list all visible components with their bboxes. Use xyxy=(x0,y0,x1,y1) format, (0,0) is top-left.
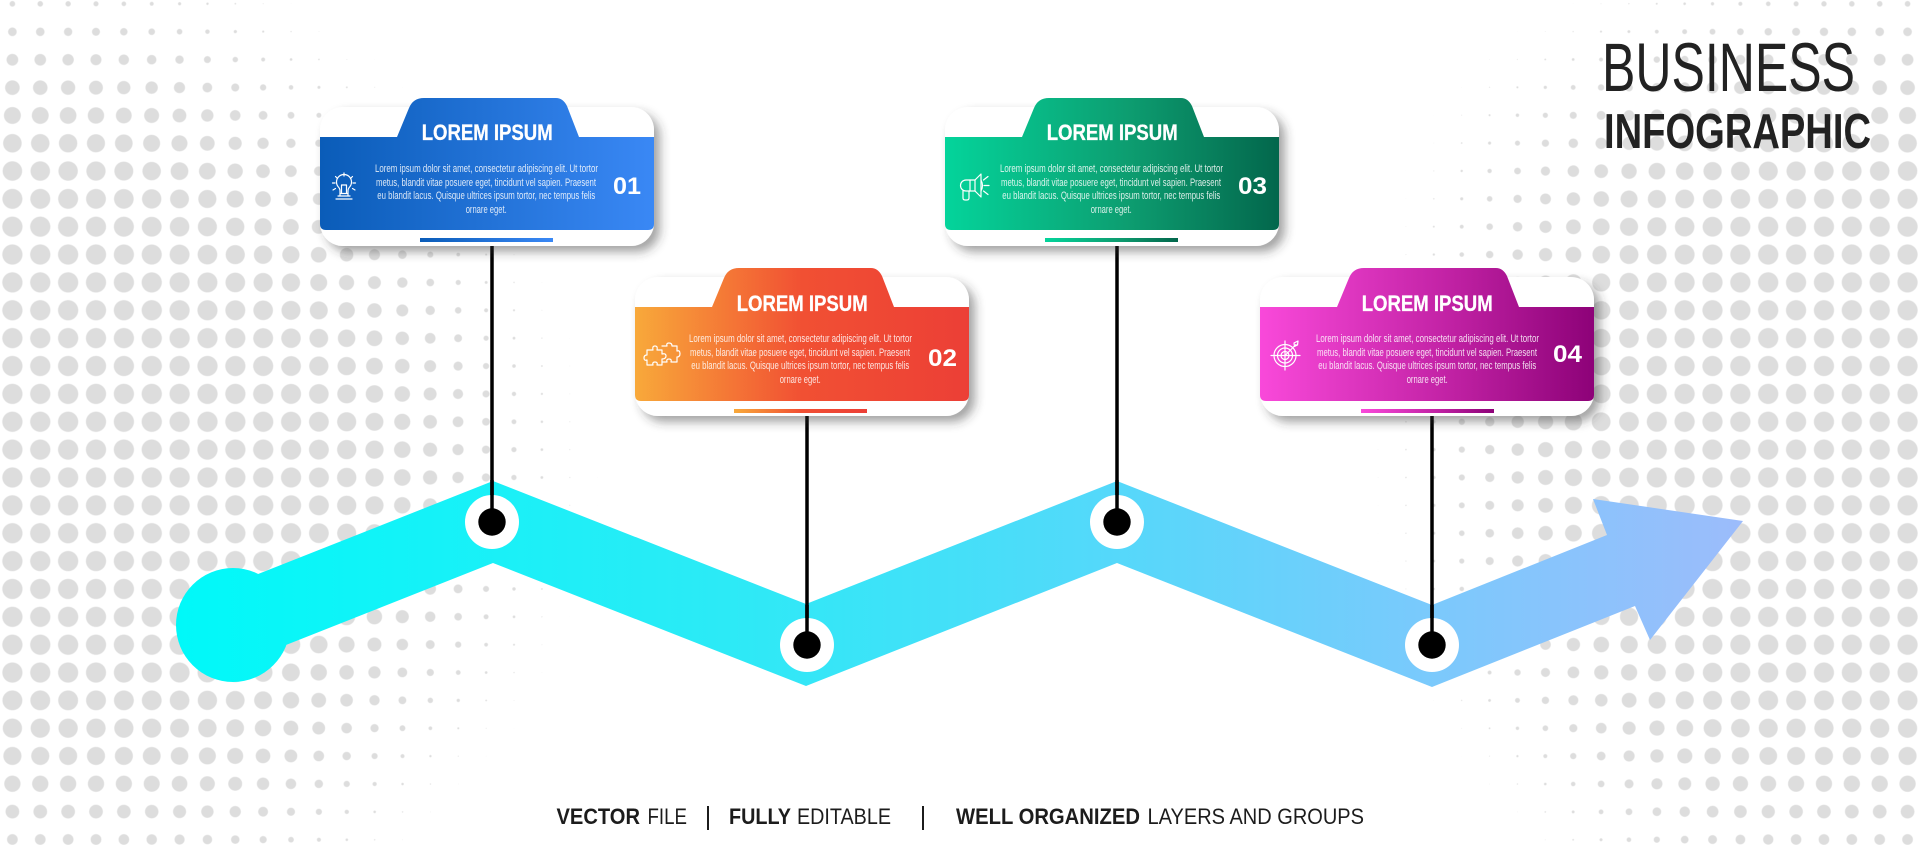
node 3 xyxy=(1090,480,1144,549)
heading 04: LOREM IPSUM xyxy=(1362,291,1493,316)
body text 03: eu blandit lacus. Quisque ultrices ipsum tortor, nec tempus felis xyxy=(1002,190,1221,202)
connector line 1 xyxy=(490,240,494,522)
number 03: 03 xyxy=(1238,173,1267,200)
icon: light bulb xyxy=(332,173,356,199)
footer tagline: FILE xyxy=(648,804,687,829)
heading 03: LOREM IPSUM xyxy=(1047,120,1178,145)
heading 01: LOREM IPSUM xyxy=(422,120,553,145)
panel: card 02 orange xyxy=(635,268,969,416)
connector line 2 xyxy=(805,410,809,645)
body text 04: ornare eget. xyxy=(1407,374,1448,386)
footer tagline: WELL ORGANIZED xyxy=(956,804,1140,829)
connector line 3 xyxy=(1115,240,1119,522)
panel: card 04 magenta xyxy=(1260,268,1594,416)
footer tagline xyxy=(556,804,1364,830)
number 01: 01 xyxy=(613,173,641,200)
body text 02: Lorem ipsum dolor sit amet, consectetur adipiscing elit. Ut tortor xyxy=(689,333,912,345)
body text 04: eu blandit lacus. Quisque ultrices ipsum tortor, nec tempus felis xyxy=(1318,360,1537,372)
body text 03: ornare eget. xyxy=(1091,204,1132,216)
connector line 4 xyxy=(1430,410,1434,645)
body text 02: metus, blandit vitae posuere eget, tincidunt vel sapien. Praesent xyxy=(690,347,910,359)
body text 03: Lorem ipsum dolor sit amet, consectetur adipiscing elit. Ut tortor xyxy=(1000,163,1223,175)
body text 04: Lorem ipsum dolor sit amet, consectetur adipiscing elit. Ut tortor xyxy=(1316,333,1539,345)
body text 03: metus, blandit vitae posuere eget, tincidunt vel sapien. Praesent xyxy=(1001,177,1221,189)
body text 04 xyxy=(1316,333,1539,386)
number 04: 04 xyxy=(1553,341,1583,368)
body text 01: metus, blandit vitae posuere eget, tincidunt vel sapien. Praesent xyxy=(376,177,596,189)
node 2 xyxy=(780,605,834,672)
node 1 xyxy=(465,480,519,549)
body text 01 xyxy=(375,163,598,216)
panel: card 01 blue xyxy=(320,98,654,246)
body text 01: eu blandit lacus. Quisque ultrices ipsum tortor, nec tempus felis xyxy=(377,190,596,202)
icon: megaphone xyxy=(960,174,989,200)
body text 02 xyxy=(689,333,912,386)
node 4 xyxy=(1405,605,1459,672)
body text 02: ornare eget. xyxy=(780,374,821,386)
footer tagline: VECTOR xyxy=(556,804,640,829)
zigzag arrow ribbon xyxy=(176,481,1743,687)
body text 03 xyxy=(1000,163,1223,216)
icon: target xyxy=(1271,341,1300,370)
number 02: 02 xyxy=(928,345,957,372)
body text 01: ornare eget. xyxy=(466,204,507,216)
footer tagline: EDITABLE xyxy=(797,804,891,829)
icon: puzzle xyxy=(644,343,680,365)
footer tagline: FULLY xyxy=(729,804,791,829)
footer tagline: LAYERS AND GROUPS xyxy=(1148,804,1364,829)
body text 04: metus, blandit vitae posuere eget, tincidunt vel sapien. Praesent xyxy=(1317,347,1537,359)
title xyxy=(1602,29,1871,159)
panel: card 03 green xyxy=(945,98,1279,246)
heading 02: LOREM IPSUM xyxy=(737,291,868,316)
body text 01: Lorem ipsum dolor sit amet, consectetur adipiscing elit. Ut tortor xyxy=(375,163,598,175)
body text 02: eu blandit lacus. Quisque ultrices ipsum tortor, nec tempus felis xyxy=(691,360,910,372)
